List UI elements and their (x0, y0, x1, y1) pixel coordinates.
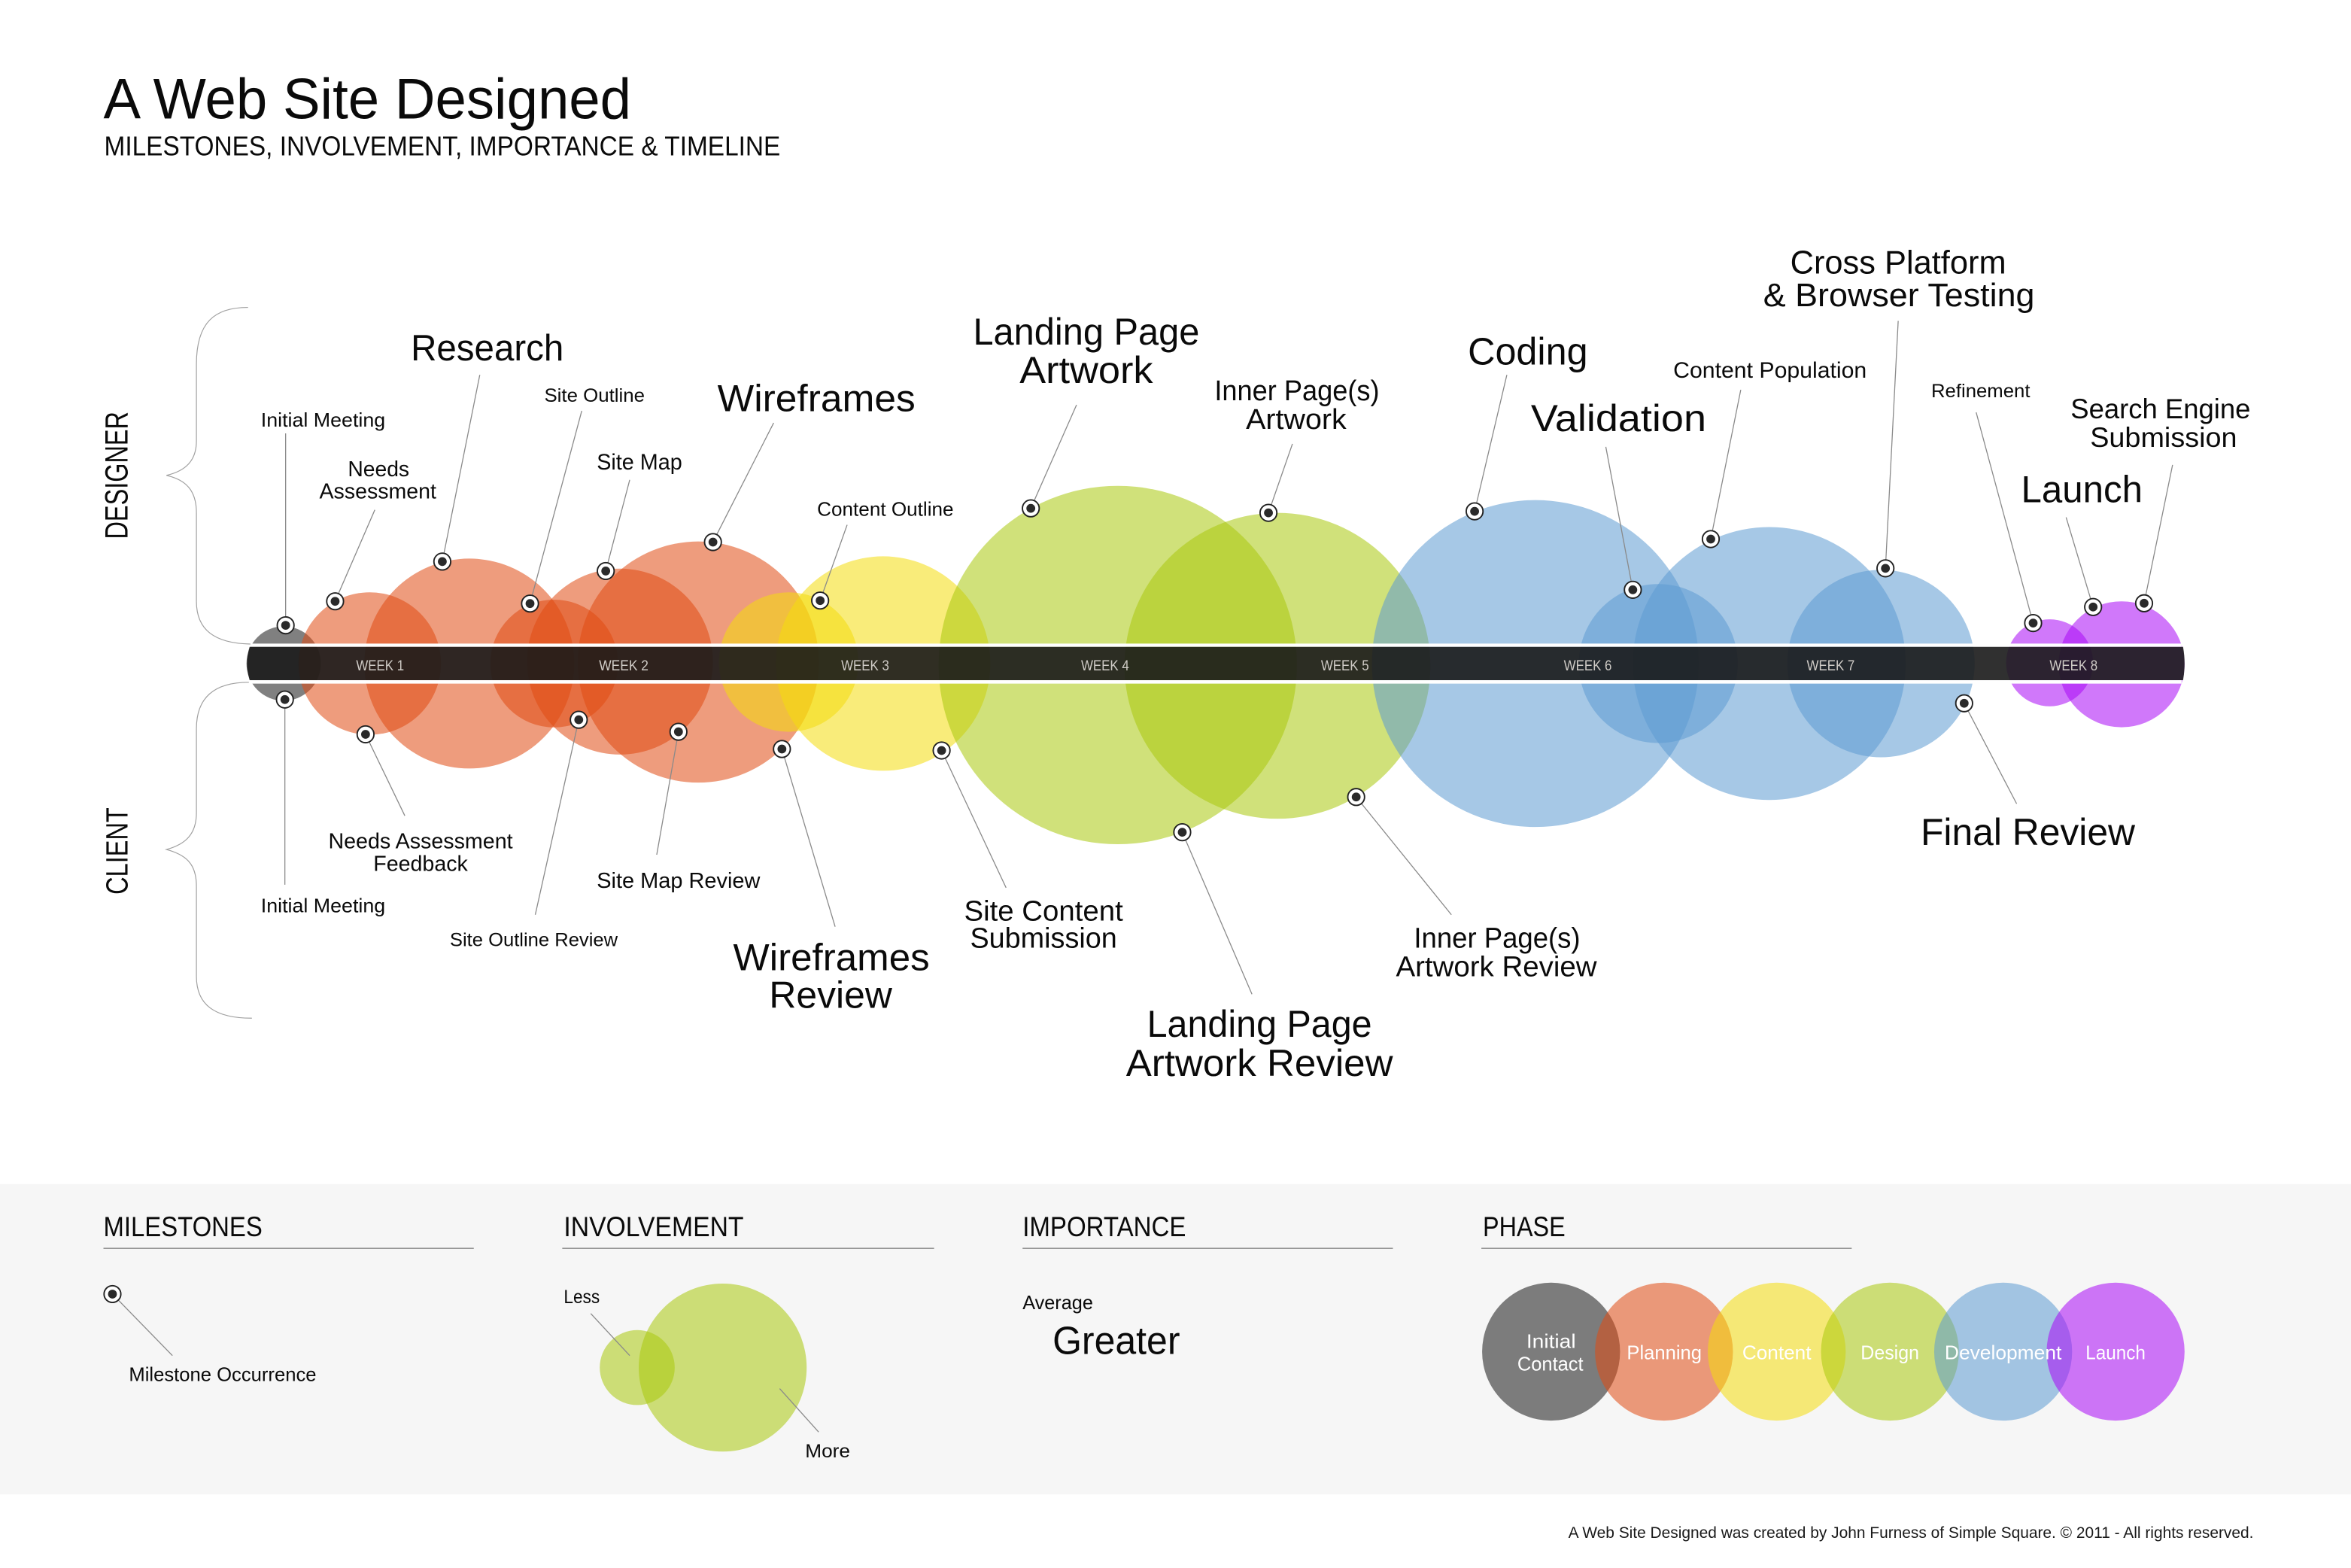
milestone: wireframes review (734, 740, 930, 1016)
legend: phase: Content (1742, 1343, 1812, 1364)
milestone: initial meeting (designer): Initial Meeting (261, 410, 385, 431)
legend: involvement: INVOLVEMENT (563, 1211, 744, 1242)
milestone: initial meeting (designer) (261, 410, 385, 634)
milestone: research (411, 328, 563, 570)
initial contact circle (247, 626, 320, 700)
milestone: inner page artwork review (1347, 789, 1597, 983)
week labels: WEEK 3 (841, 658, 889, 674)
milestone: content outline: Content Outline (817, 500, 954, 521)
milestone: site content submission (933, 742, 1123, 955)
legend: involvement: Less (563, 1287, 600, 1308)
milestone: research: Research (411, 328, 563, 369)
milestone: landing page artwork: Artwork (1019, 349, 1153, 391)
week labels: WEEK 8 (2049, 658, 2097, 674)
title: A Web Site Designed (104, 67, 631, 131)
milestone: cross platform testing: & Browser Testing (1763, 277, 2034, 314)
milestone: launch (2021, 469, 2143, 615)
legend: phase (1481, 1211, 2185, 1421)
week labels: WEEK 7 (1807, 658, 1854, 674)
design circles (939, 486, 1430, 844)
legend: phase: Design (1860, 1343, 1919, 1364)
week labels: WEEK 5 (1321, 658, 1369, 674)
milestone: inner page artwork (1214, 375, 1380, 521)
milestone: needs assessment: Needs (348, 457, 409, 482)
footer credit: A Web Site Designed was created by John Furness of Simple Square. © 2011 - All rights reserved. (1569, 1524, 2253, 1542)
milestone: inner page artwork review: Artwork Review (1396, 951, 1597, 983)
milestone: needs assessment feedback: Feedback (373, 852, 468, 876)
legend: phase: Launch (2085, 1343, 2146, 1364)
client brace and label (99, 682, 252, 1018)
milestone: site outline review (450, 711, 618, 951)
legend: involvement: More (805, 1441, 850, 1462)
legend: importance (1022, 1211, 1393, 1363)
milestone: search engine submission (2070, 394, 2250, 612)
milestone: final review (1921, 695, 2136, 853)
timeline circles (247, 486, 2185, 844)
content circles (719, 556, 990, 770)
launch circles (2006, 601, 2185, 728)
milestone: landing page artwork review (1126, 824, 1394, 1084)
milestone: site outline: Site Outline (544, 385, 645, 406)
week labels: WEEK 4 (1081, 658, 1129, 674)
milestone: refinement: Refinement (1931, 381, 2031, 402)
legend: importance: Average (1022, 1293, 1093, 1314)
milestone: site map review (597, 723, 761, 893)
week labels: WEEK 2 (599, 658, 648, 674)
milestone: site content submission: Submission (970, 923, 1117, 955)
milestone: content population (1673, 358, 1867, 548)
milestone: refinement (1931, 381, 2042, 631)
milestone: validation: Validation (1531, 397, 1706, 439)
milestone: inner page artwork: Artwork (1246, 404, 1347, 436)
milestone: needs assessment feedback: Needs Assessment (328, 829, 513, 853)
milestone: landing page artwork review: Artwork Review (1126, 1042, 1394, 1084)
milestone: site map review: Site Map Review (597, 869, 761, 893)
legend: importance: Greater (1052, 1319, 1180, 1363)
designer brace and label (99, 308, 251, 644)
legend: phase: Planning (1627, 1343, 1702, 1364)
milestone: final review: Final Review (1921, 811, 2136, 853)
milestone: site outline review: Site Outline Review (450, 930, 618, 951)
milestone: search engine submission: Search Engine (2070, 394, 2250, 424)
week labels: WEEK 6 (1564, 658, 1611, 674)
week labels (356, 658, 2097, 674)
milestone: coding: Coding (1468, 330, 1588, 372)
legend: involvement (562, 1211, 934, 1462)
milestone: site map: Site Map (597, 450, 682, 475)
designer brace and label: DESIGNER (99, 412, 135, 539)
milestone: wireframes: Wireframes (718, 378, 916, 420)
legend: phase: Initial (1526, 1332, 1576, 1353)
legend: phase: PHASE (1483, 1211, 1566, 1242)
milestone: landing page artwork: Landing Page (973, 311, 1199, 353)
client brace and label: CLIENT (99, 807, 134, 895)
timeline bar (247, 643, 2185, 684)
legend panel (0, 1184, 2351, 1494)
development circles (1372, 500, 1975, 827)
milestone: validation (1531, 397, 1706, 598)
milestone: initial meeting (client) (261, 691, 385, 917)
milestone: inner page artwork review: Inner Page(s) (1414, 923, 1581, 955)
milestone: search engine submission: Submission (2090, 422, 2237, 453)
milestone: initial meeting (client): Initial Meeting (261, 896, 385, 917)
milestone: landing page artwork (973, 311, 1199, 517)
legend: phase: Development (1945, 1343, 2061, 1364)
milestone: cross platform testing: Cross Platform (1791, 244, 2006, 281)
milestone: site map (597, 450, 682, 579)
milestone: needs assessment: Assessment (320, 480, 436, 504)
legend: milestones (104, 1211, 474, 1386)
milestone: wireframes review: Wireframes (734, 936, 930, 978)
milestone: wireframes review: Review (769, 974, 893, 1016)
planning circles (299, 542, 819, 782)
milestone: coding (1466, 330, 1588, 520)
milestone: site content submission: Site Content (964, 896, 1123, 928)
legend: importance: IMPORTANCE (1022, 1211, 1186, 1242)
milestone: launch: Launch (2021, 469, 2143, 511)
legend: milestones: MILESTONES (104, 1211, 263, 1242)
legend: milestones: Milestone Occurrence (129, 1365, 317, 1386)
legend: phase: Contact (1517, 1354, 1584, 1375)
milestone: cross platform testing (1763, 244, 2034, 577)
milestone: content population: Content Population (1673, 358, 1867, 383)
milestone: site outline (521, 385, 645, 612)
milestone: content outline (812, 500, 954, 609)
week labels: WEEK 1 (356, 658, 404, 674)
milestone: needs assessment (320, 457, 436, 609)
milestone: landing page artwork review: Landing Page (1147, 1003, 1372, 1045)
subtitle: MILESTONES, INVOLVEMENT, IMPORTANCE & TIMELINE (105, 130, 780, 161)
milestone: inner page artwork: Inner Page(s) (1214, 375, 1380, 407)
milestone: needs assessment feedback (328, 726, 513, 876)
milestone: wireframes (705, 378, 916, 551)
